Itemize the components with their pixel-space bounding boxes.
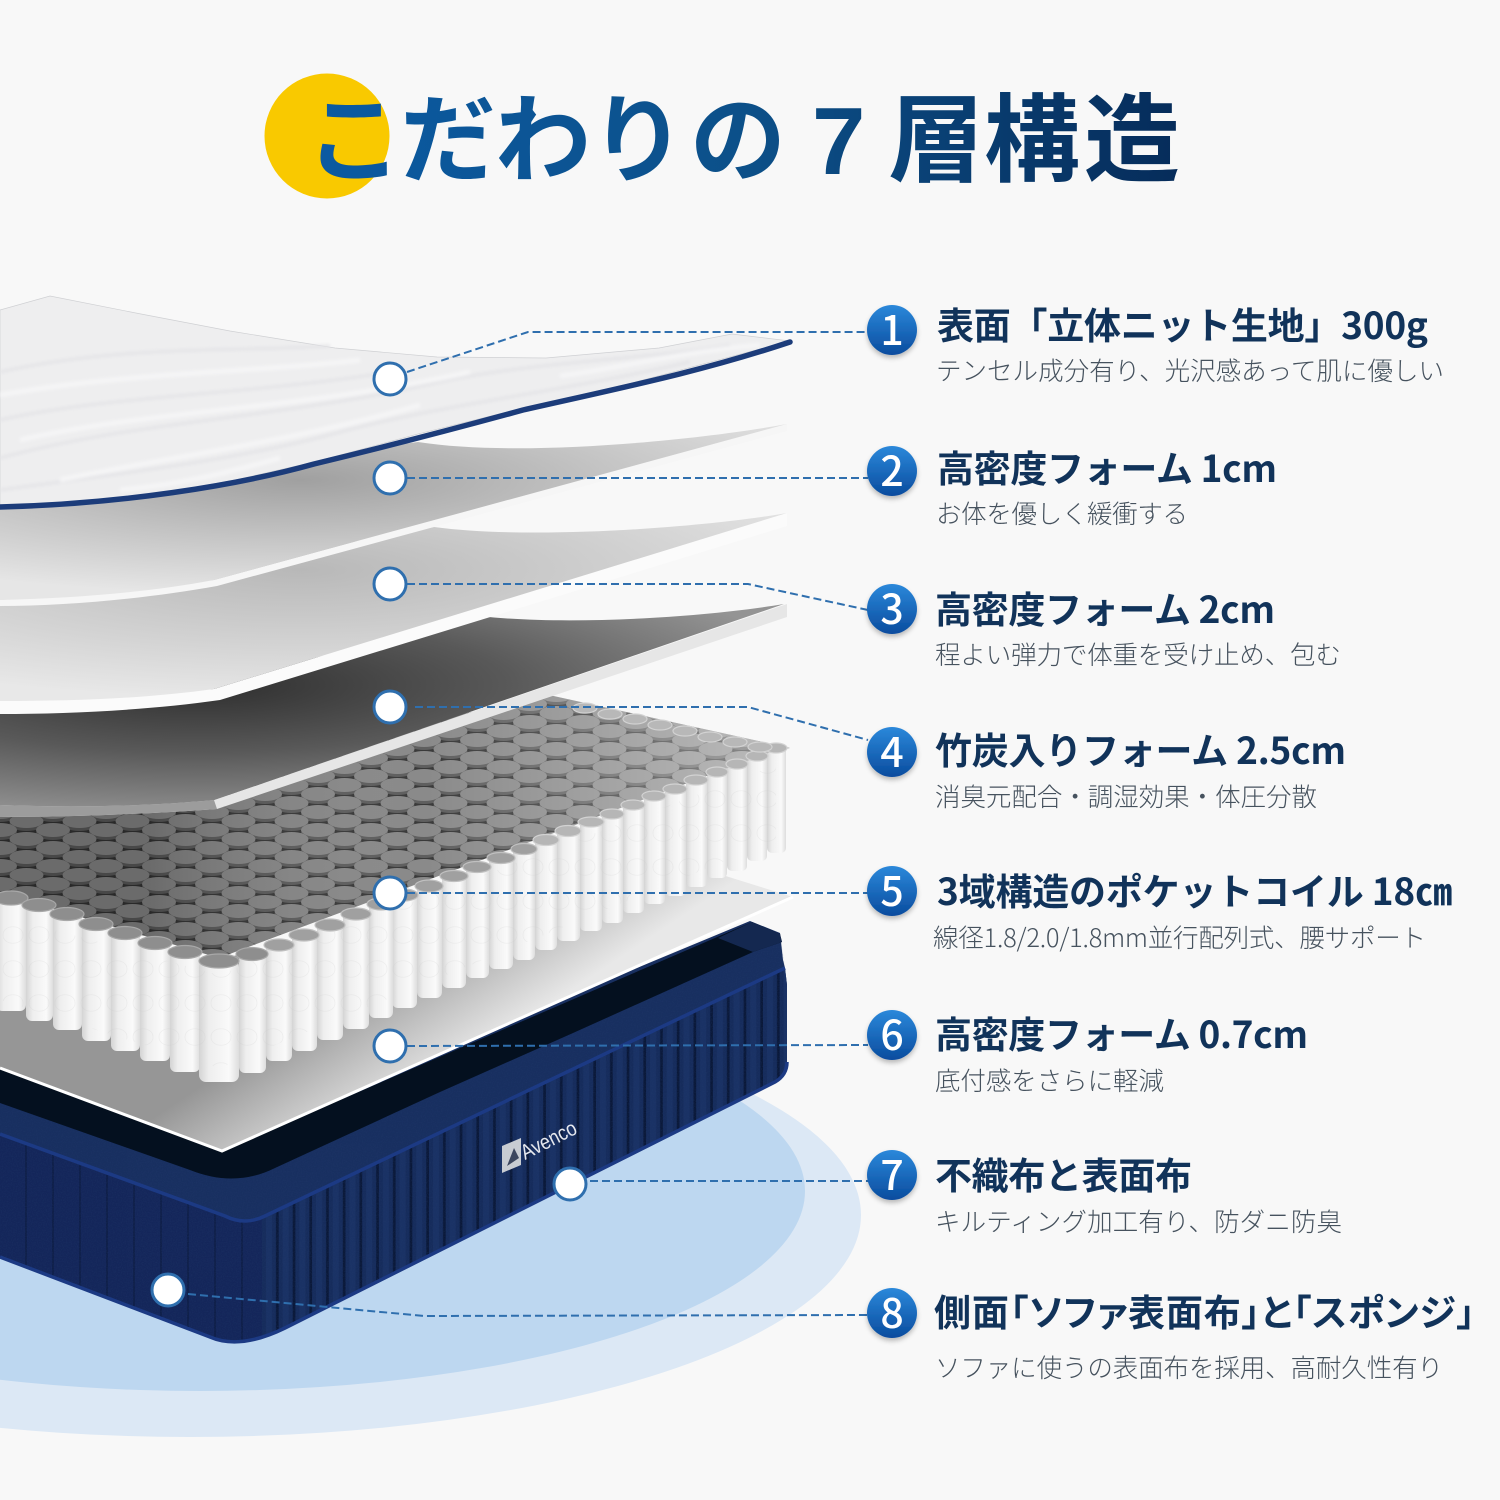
item 2	[867, 438, 1277, 531]
title text: こだわりの7層構造	[306, 88, 1180, 195]
item 1	[867, 296, 1444, 388]
inner back fabric	[718, 922, 782, 952]
badge 7	[867, 1142, 917, 1202]
item 4	[867, 719, 1346, 814]
heading 7: 不織布と表面布	[935, 1146, 1192, 1200]
badge 7: 7	[880, 1142, 904, 1202]
badge 2	[867, 438, 917, 498]
brand logo	[502, 1117, 581, 1173]
layer 2 foam	[0, 424, 787, 606]
heading 8: 側面「ソファ表面布」と「スポンジ」	[934, 1283, 1475, 1337]
navy edge	[0, 342, 790, 507]
title	[264, 74, 1180, 198]
description 8: ソファに使うの表面布を採用、高耐久性有り	[935, 1348, 1443, 1385]
left side coils	[0, 898, 239, 1082]
leader lines	[188, 332, 868, 1316]
badge 5	[867, 858, 917, 918]
description 3: 程よい弾力で体重を受け止め、包む	[935, 635, 1341, 672]
badge 1: 1	[880, 297, 904, 357]
mattress base	[0, 920, 792, 1355]
layer 1 knit fabric	[0, 296, 790, 507]
description 7: キルティング加工有り、防ダニ防臭	[935, 1202, 1342, 1239]
badge 2: 2	[880, 438, 904, 498]
dark recess	[0, 922, 782, 1179]
yellow circle	[264, 74, 390, 198]
layer 4 bamboo charcoal foam	[0, 604, 787, 817]
coil tops surface	[0, 695, 790, 958]
back rim of coil tops	[573, 703, 772, 752]
item 7	[867, 1142, 1342, 1239]
badge 6	[867, 1002, 917, 1062]
badge 6: 6	[880, 1002, 904, 1062]
badge 3	[867, 576, 917, 636]
side panel	[0, 960, 792, 1355]
piping	[0, 968, 787, 1342]
item 5	[867, 858, 1452, 955]
top border band	[0, 921, 785, 1222]
badge 8: 8	[880, 1280, 904, 1340]
layer 3 foam	[0, 513, 787, 714]
heading 1: 表面「立体ニット生地」300g	[937, 296, 1428, 350]
fabric texture	[25, 942, 785, 1330]
heading 5: 3域構造のポケットコイル 18㎝	[937, 862, 1452, 916]
spring wire hints	[0, 765, 776, 1068]
badge 3: 3	[880, 576, 904, 636]
description 4: 消臭元配合・調湿効果・体圧分散	[935, 777, 1317, 814]
front rim of coil tops	[0, 743, 787, 968]
badge 8	[867, 1280, 917, 1340]
brand logo: Avenco	[517, 1117, 581, 1164]
item 6	[867, 1002, 1308, 1098]
quilting folds	[0, 345, 760, 490]
badge 4: 4	[880, 719, 904, 779]
badge 1	[867, 297, 917, 357]
heading 4: 竹炭入りフォーム 2.5cm	[935, 721, 1346, 775]
description 1: テンセル成分有り、光沢感あって肌に優しい	[936, 351, 1444, 388]
background blue ellipses	[0, 991, 861, 1437]
item 8	[867, 1280, 1475, 1385]
marker dots	[152, 363, 586, 1306]
description 6: 底付感をさらに軽減	[935, 1061, 1164, 1098]
description 2: お体を優しく緩衝する	[936, 494, 1188, 531]
description 5: 線径1.8/2.0/1.8mm並行配列式、腰サポート	[933, 918, 1426, 955]
item 3	[867, 576, 1341, 672]
badge 5: 5	[880, 858, 904, 918]
right side coils	[239, 746, 786, 1073]
badge 4	[867, 719, 917, 779]
pocket coil layer	[0, 695, 790, 1082]
layer 6 sheet	[0, 868, 793, 1151]
heading 6: 高密度フォーム 0.7cm	[935, 1005, 1308, 1059]
heading 3: 高密度フォーム 2cm	[935, 580, 1275, 634]
heading 2: 高密度フォーム 1cm	[937, 439, 1277, 493]
